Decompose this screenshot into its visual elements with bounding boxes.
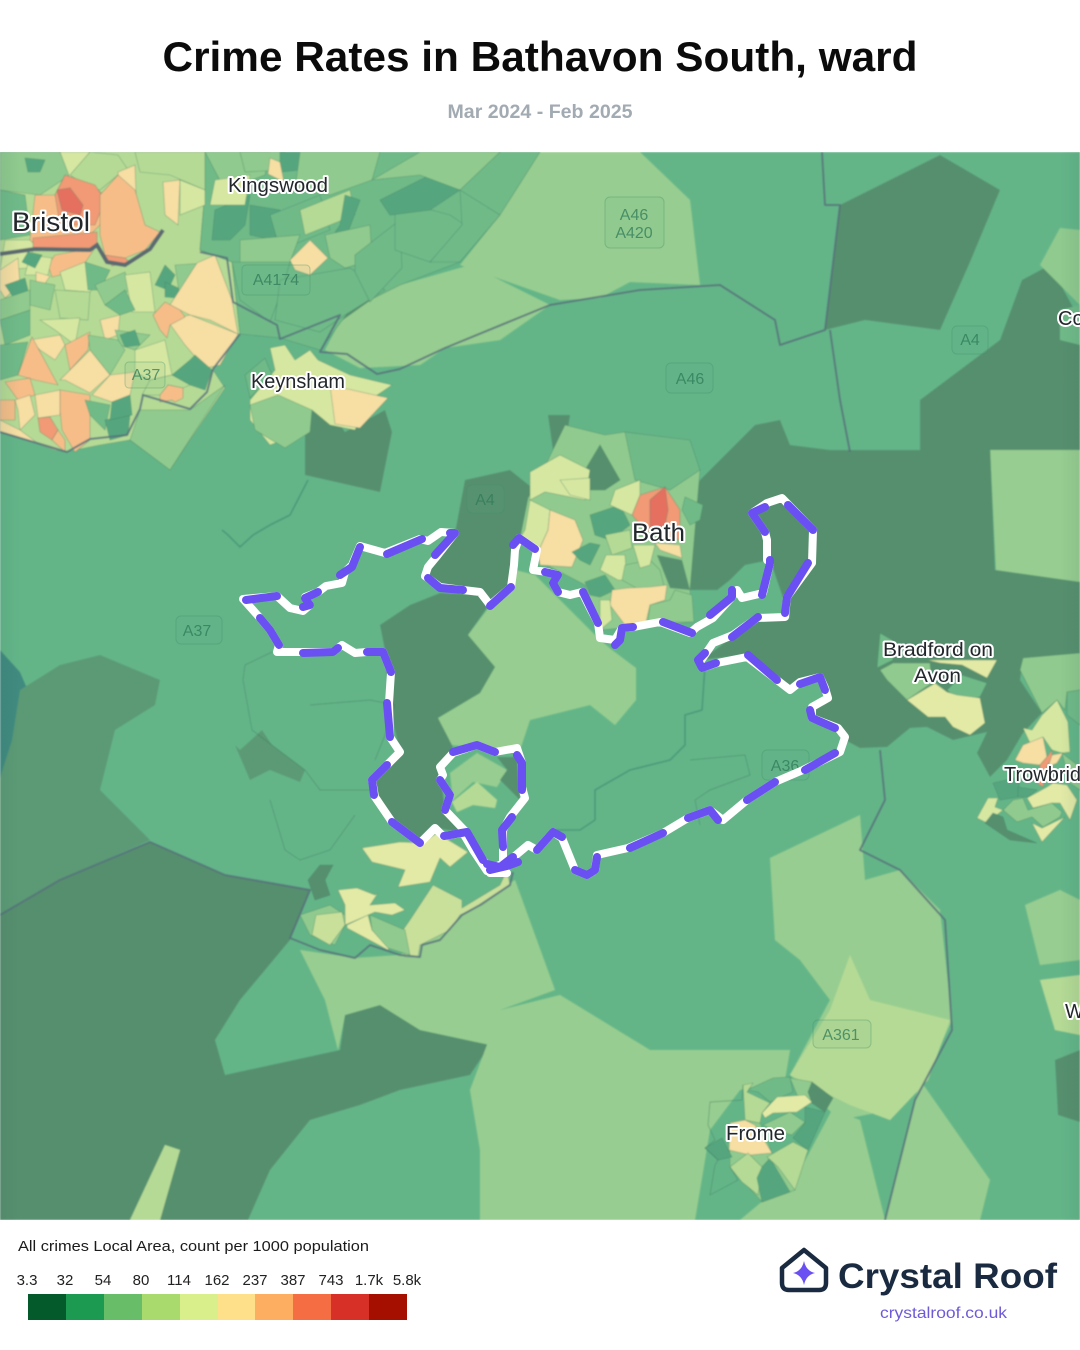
region: central dark wards bbox=[270, 155, 1080, 1122]
legend scale labels: 5.8k bbox=[393, 1272, 422, 1289]
road shield: A4 centre: A4 bbox=[475, 492, 495, 509]
road shield: A4 east bbox=[952, 326, 988, 354]
Frome wards bbox=[705, 1077, 833, 1202]
road shield: A37: A37 bbox=[183, 623, 211, 640]
river lines bbox=[222, 480, 705, 830]
legend scale labels bbox=[17, 1272, 422, 1289]
legend scale labels: 1.7k bbox=[355, 1272, 384, 1289]
road shield: A36: A36 bbox=[771, 758, 799, 775]
place labels: Kingswood bbox=[228, 175, 328, 197]
road shield: A37 north bbox=[125, 362, 165, 388]
legend title: All crimes Local Area, count per 1000 population bbox=[18, 1238, 369, 1255]
Hole ward inside the boundary bbox=[450, 753, 520, 812]
road shield: A46 A420 bbox=[605, 197, 664, 248]
road shield: A361: A361 bbox=[822, 1027, 860, 1044]
ward boundary: purple dashes bbox=[246, 505, 835, 875]
legend colour bar bbox=[28, 1294, 407, 1320]
road shield: A37 bbox=[176, 616, 222, 644]
edge shading left bbox=[0, 152, 12, 1220]
road shield: A46 A420: A420 bbox=[615, 225, 653, 242]
road shield: A4 centre bbox=[467, 485, 504, 513]
place labels: Bradford on bbox=[883, 639, 993, 661]
region: base patch south of Bath bbox=[718, 582, 728, 590]
Bath wards bbox=[520, 425, 703, 630]
Bradford on Avon wards bbox=[877, 633, 997, 735]
legend scale labels: 237 bbox=[242, 1272, 268, 1289]
city river bbox=[0, 230, 163, 265]
road shield: A46: A46 bbox=[676, 371, 704, 388]
edge shading right bbox=[1069, 152, 1080, 1220]
road shield: A4174: A4174 bbox=[253, 272, 299, 289]
place labels: Bristol bbox=[12, 207, 90, 237]
ward outlines in the rural west bbox=[243, 652, 750, 860]
Keynsham wards bbox=[245, 345, 392, 448]
place labels: Keynsham bbox=[251, 371, 345, 393]
choropleth map bbox=[0, 152, 1080, 1220]
place labels: Frome bbox=[726, 1123, 785, 1145]
legend scale labels: 387 bbox=[280, 1272, 306, 1289]
Trowbridge wards bbox=[977, 653, 1080, 843]
road shield: A36 bbox=[762, 750, 809, 780]
Frome outer ward outlines bbox=[705, 1085, 743, 1195]
region: dark south-west wards bbox=[0, 655, 490, 1220]
ward boundary: white line bbox=[243, 498, 845, 875]
legend scale labels: 162 bbox=[204, 1272, 230, 1289]
legend scale labels: 743 bbox=[318, 1272, 344, 1289]
logo icon: crystal roof house bbox=[782, 1250, 826, 1290]
road shield: A361 bbox=[813, 1020, 871, 1048]
region: light wards bbox=[300, 152, 1080, 1220]
logo wordmark: Crystal Roof bbox=[838, 1257, 1057, 1296]
legend scale labels: 54 bbox=[95, 1272, 111, 1289]
title: Crime Rates in Bathavon South, ward bbox=[162, 33, 918, 80]
place labels bbox=[12, 175, 1080, 1145]
road shield: A4174 bbox=[242, 265, 310, 295]
legend scale labels: 3.3 bbox=[17, 1272, 37, 1289]
South wards bbox=[300, 833, 510, 957]
date range subtitle: Mar 2024 - Feb 2025 bbox=[448, 102, 633, 123]
road shield: A46 bbox=[666, 363, 713, 393]
website link: crystalroof.co.uk bbox=[880, 1305, 1008, 1322]
region: coast bbox=[0, 650, 26, 776]
legend scale labels: 114 bbox=[167, 1272, 191, 1289]
legend scale labels: 80 bbox=[133, 1272, 149, 1289]
Bristol urban wards bbox=[0, 152, 540, 470]
legend scale labels: 32 bbox=[57, 1272, 73, 1289]
region: east yellow-green wards bbox=[130, 955, 1080, 1220]
district boundary lines bbox=[0, 152, 952, 1220]
road shield: A37 north: A37 bbox=[132, 367, 160, 384]
small top-right wards bbox=[1040, 228, 1080, 345]
place labels: Bath bbox=[632, 519, 685, 547]
road shield: A46 A420: A46 bbox=[620, 207, 648, 224]
place labels: Avon bbox=[914, 665, 961, 687]
road shield: A4 east: A4 bbox=[960, 332, 980, 349]
